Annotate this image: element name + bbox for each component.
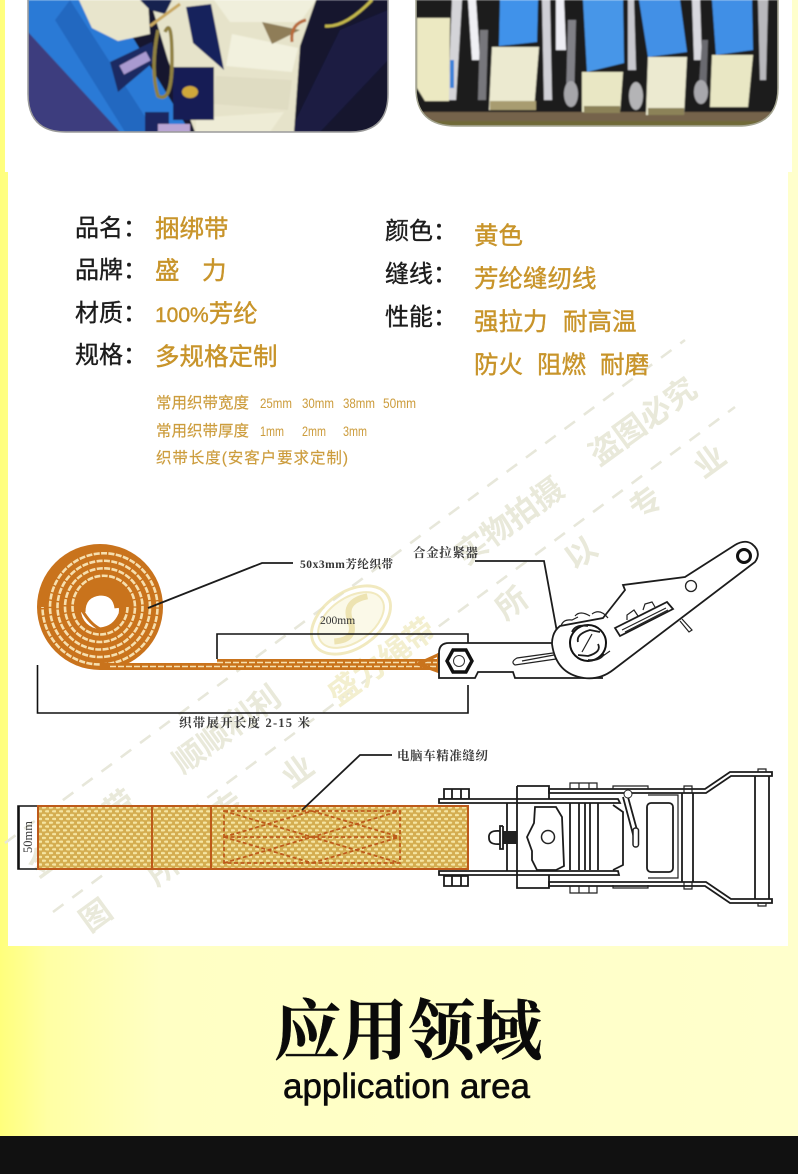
tags bbox=[186, 4, 224, 70]
chains bbox=[154, 28, 172, 97]
diagram: flat strap and ratchet top view: 50mm bbox=[21, 821, 35, 853]
spec list: left column: 多规格定制 bbox=[155, 343, 278, 371]
section subtitle: application area bbox=[283, 1067, 531, 1106]
size notes: 50mm bbox=[383, 395, 416, 411]
spec list: right column: 阻燃 bbox=[537, 351, 586, 379]
stitching leader bbox=[302, 755, 392, 810]
ratchet: handle bbox=[549, 772, 772, 903]
ratchet: side bars bbox=[439, 799, 620, 875]
white content panel bbox=[5, 0, 792, 946]
ratchet: threaded bolt bbox=[503, 831, 517, 844]
ratchet: gear ends bbox=[570, 783, 648, 893]
watermark: 以 bbox=[558, 530, 604, 577]
spec list: right column: 芳纶缝纫线 bbox=[474, 265, 596, 293]
ratchet: frame bbox=[507, 786, 549, 888]
watermark: 业 bbox=[687, 438, 733, 485]
strap coil bbox=[37, 544, 450, 672]
slot bbox=[513, 653, 556, 665]
bottom black bar bbox=[0, 1136, 798, 1174]
arm end hole bbox=[738, 550, 750, 562]
diagram: rolled strap and ratchet side view: 200mm bbox=[320, 615, 355, 627]
size notes bbox=[156, 394, 416, 467]
spec list: right column: 性能： bbox=[385, 304, 457, 331]
size notes: 织带长度(安客户要求定制) bbox=[156, 449, 348, 467]
size notes: 25mm bbox=[260, 395, 292, 411]
ratchet teeth bbox=[561, 612, 608, 626]
diagram: rolled strap and ratchet side view: 织带展开长度 2-15 米 bbox=[179, 715, 310, 730]
blue sheet bbox=[28, 0, 190, 132]
spec list: right column: 耐高温 bbox=[563, 308, 636, 336]
ratchet: inner window bbox=[647, 803, 673, 872]
watermark: 盗图必究 bbox=[582, 371, 703, 472]
watermark: 实物拍摄 bbox=[449, 471, 570, 572]
spec list: left column: 品牌： bbox=[75, 257, 147, 284]
size notes: 30mm bbox=[302, 395, 334, 411]
cream rolls bbox=[79, 0, 150, 41]
spec list: left column: 规格： bbox=[75, 342, 147, 369]
woven strap bbox=[38, 806, 468, 869]
diagram: flat strap and ratchet top view: 电脑车精准缝纫 bbox=[397, 748, 488, 763]
strap seams bbox=[152, 806, 211, 869]
size notes: 2mm bbox=[302, 423, 326, 439]
navy cloth bbox=[265, 0, 388, 132]
spec list: left column: 力 bbox=[202, 257, 226, 285]
diagram: rolled strap and ratchet side view bbox=[37, 542, 758, 730]
size notes: 1mm bbox=[260, 423, 284, 439]
watermark: 所 bbox=[489, 580, 535, 627]
spec list: right column: 黄色 bbox=[474, 222, 523, 250]
size notes: 3mm bbox=[343, 423, 367, 439]
blue labels bbox=[499, 0, 538, 46]
spec list: left column: 品名： bbox=[75, 215, 147, 242]
width dimension bbox=[18, 806, 37, 869]
watermark: 专 bbox=[206, 785, 252, 832]
chrome bbox=[448, 0, 462, 100]
ratchet gear bbox=[570, 625, 606, 661]
watermark: 所 bbox=[140, 846, 186, 893]
spec list: right column bbox=[385, 218, 649, 379]
stitching bbox=[224, 811, 400, 863]
ratchet label: 合金拉紧器 bbox=[413, 545, 478, 560]
watermark: 金牌绑带 bbox=[21, 783, 142, 884]
diagram: flat strap and ratchet top view bbox=[18, 748, 772, 906]
watermark: 专 bbox=[623, 480, 669, 527]
size notes: 38mm bbox=[343, 395, 375, 411]
logo watermark bbox=[299, 572, 403, 668]
size notes: 常用织带厚度 bbox=[156, 422, 249, 440]
watermark bbox=[5, 340, 735, 939]
spec list: right column: 强拉力 bbox=[474, 309, 548, 336]
spec list: right column: 缝线： bbox=[385, 261, 457, 288]
arm slot and tabs bbox=[615, 602, 673, 636]
watermark: 盛力绳带 bbox=[321, 611, 442, 712]
spec list: left column: 材质： bbox=[75, 300, 147, 327]
cream straps bbox=[417, 18, 450, 101]
dimension 200mm bbox=[217, 634, 468, 659]
spec list: right column: 耐磨 bbox=[600, 351, 649, 379]
watermark: 图 bbox=[73, 892, 119, 939]
photo: rolled straps on blue cloth bbox=[28, 0, 388, 134]
photo: packaged ratchet straps bbox=[416, 0, 778, 126]
ratchet: spring lever bbox=[623, 797, 637, 838]
spec list: left column: 100%芳纶 bbox=[155, 300, 258, 328]
coil leader line bbox=[148, 563, 293, 608]
strap label: 50x3mm芳纶织带 bbox=[300, 557, 394, 571]
dimension total length bbox=[38, 665, 468, 713]
ratchet base plate bbox=[439, 643, 603, 678]
watermark: 顺顺利利 bbox=[166, 679, 287, 780]
spec list: left column: 捆绑带 bbox=[155, 215, 228, 243]
spec list: right column: 颜色： bbox=[385, 218, 457, 245]
spec list: left column bbox=[75, 215, 278, 371]
watermark: 业 bbox=[275, 748, 321, 795]
size notes: 常用织带宽度 bbox=[156, 394, 249, 412]
hex bolt bbox=[447, 650, 472, 672]
section title: 应用领域 bbox=[274, 996, 542, 1069]
spec list: right column: 防火 bbox=[474, 352, 523, 379]
ratchet arm bbox=[552, 542, 758, 678]
ratchet: centre plate bbox=[527, 807, 564, 870]
spec list: left column: 盛 bbox=[155, 258, 180, 285]
ratchet: bolts bbox=[444, 789, 469, 886]
